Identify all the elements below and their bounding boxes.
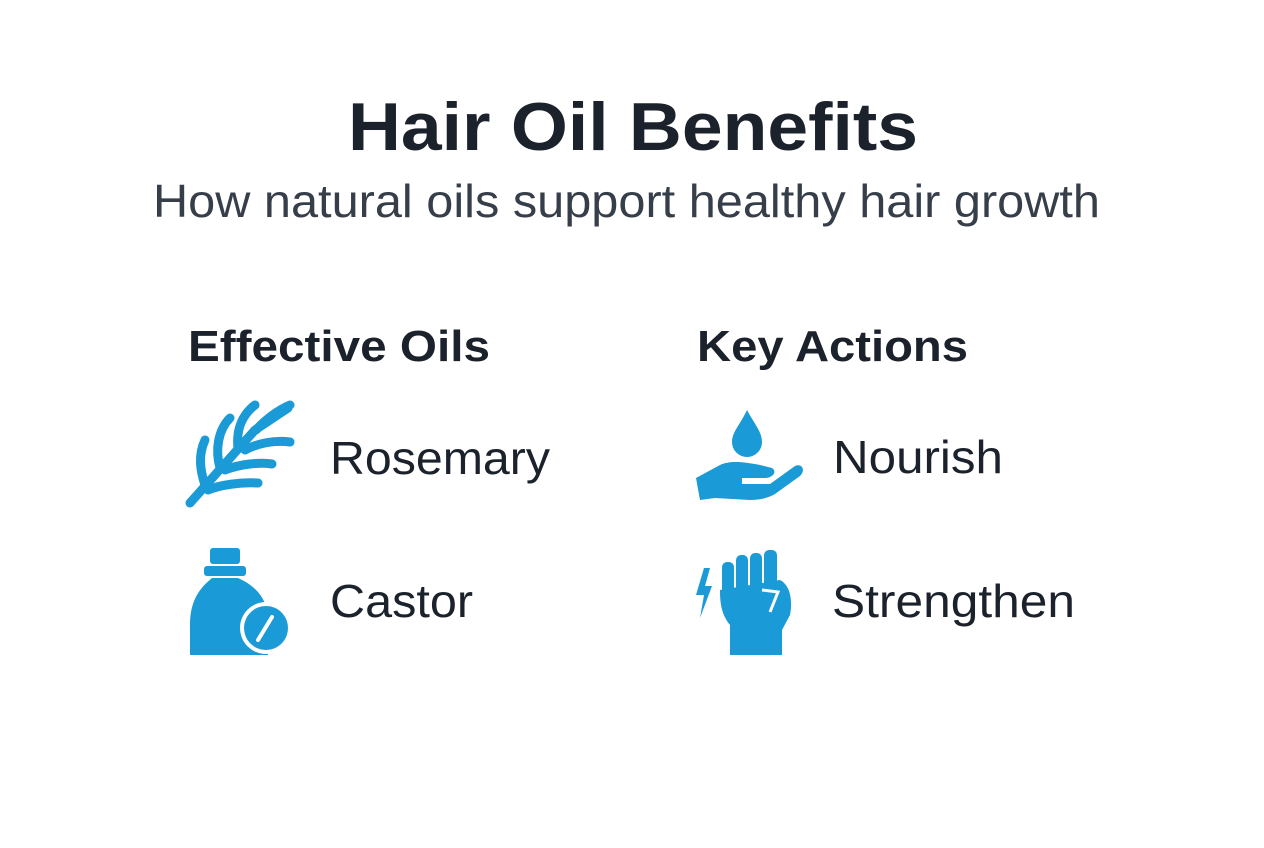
icon: rosemary [190,405,290,503]
icon: fist [696,550,791,655]
icon: castor bottle [190,548,292,655]
label: Strengthen: Strengthen [832,575,1075,627]
heading: Effective Oils: Effective Oils [188,322,490,371]
label: Castor: Castor [330,575,473,627]
title: Hair Oil Benefits [348,89,918,165]
heading: Key Actions: Key Actions [697,322,968,371]
icon: hand with drop [696,410,803,500]
label: Rosemary: Rosemary [330,432,550,484]
label: Nourish: Nourish [833,431,1003,483]
panel: key actions [696,322,1075,655]
panel: effective oils [188,322,550,655]
subtitle: How natural oils support healthy hair growth [153,175,1100,227]
